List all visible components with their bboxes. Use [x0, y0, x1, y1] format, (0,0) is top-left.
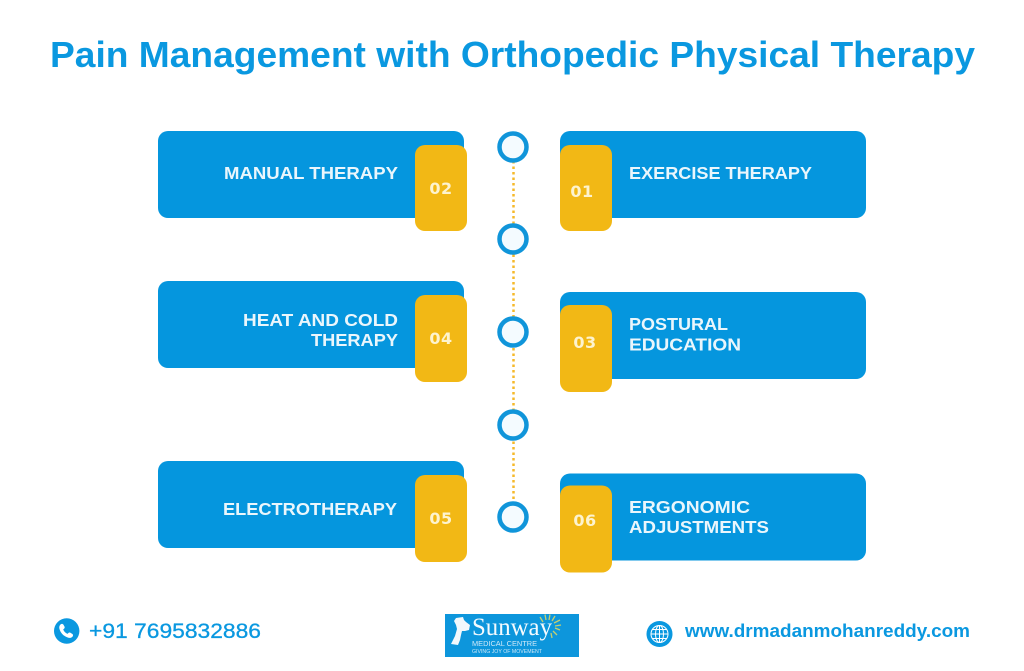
label line 2: THERAPY: [311, 330, 398, 350]
number: 01: [570, 182, 594, 201]
logo subtitle: MEDICAL CENTRE: [472, 639, 537, 648]
logo name: Sunway: [472, 614, 552, 641]
phone number: +91 7695832886: [89, 620, 261, 643]
label: ERGONOMIC: [629, 497, 750, 517]
number tag: [560, 486, 612, 572]
icon: sun rays: [540, 614, 561, 638]
number tag: [560, 145, 612, 231]
card 02: manual therapy: [158, 131, 467, 231]
label line 2: EDUCATION: [629, 334, 741, 354]
card 01: exercise therapy: [560, 131, 866, 231]
number: 02: [429, 179, 453, 198]
card 06: ergonomic adjustments: [560, 474, 866, 572]
number: 06: [573, 511, 597, 530]
number: 03: [573, 333, 597, 352]
label: POSTURAL: [629, 314, 728, 334]
label: EXERCISE THERAPY: [629, 163, 812, 183]
icon: globe: [646, 621, 672, 647]
icon: phone: [54, 618, 79, 644]
label: ELECTROTHERAPY: [223, 499, 397, 519]
logo: Sunway Medical Centre: [445, 614, 579, 657]
card 03: postural education: [560, 292, 866, 392]
logo tagline: GIVING JOY OF MOVEMENT: [472, 649, 542, 655]
icon: knee joint: [451, 617, 470, 645]
timeline node 3: [500, 318, 526, 346]
timeline node 1: [500, 134, 526, 160]
website url: www.drmadanmohanreddy.com: [684, 621, 970, 641]
label: HEAT AND COLD: [243, 310, 398, 330]
number tag: [560, 305, 612, 392]
phone contact: [54, 618, 261, 644]
timeline: [500, 134, 526, 530]
label: MANUAL THERAPY: [224, 163, 398, 183]
number tag: [415, 475, 467, 562]
timeline node 2: [500, 226, 526, 252]
timeline node 4: [500, 412, 526, 438]
website contact: [646, 621, 970, 647]
timeline node 5: [500, 504, 526, 530]
number tag: [415, 295, 467, 382]
number tag: [415, 145, 467, 231]
label line 2: ADJUSTMENTS: [629, 517, 769, 537]
card 05: electrotherapy: [158, 461, 467, 562]
card 04: heat and cold therapy: [158, 281, 467, 382]
title: Pain Management with Orthopedic Physical Therapy: [50, 34, 975, 75]
number: 05: [429, 509, 453, 528]
number: 04: [429, 329, 453, 348]
